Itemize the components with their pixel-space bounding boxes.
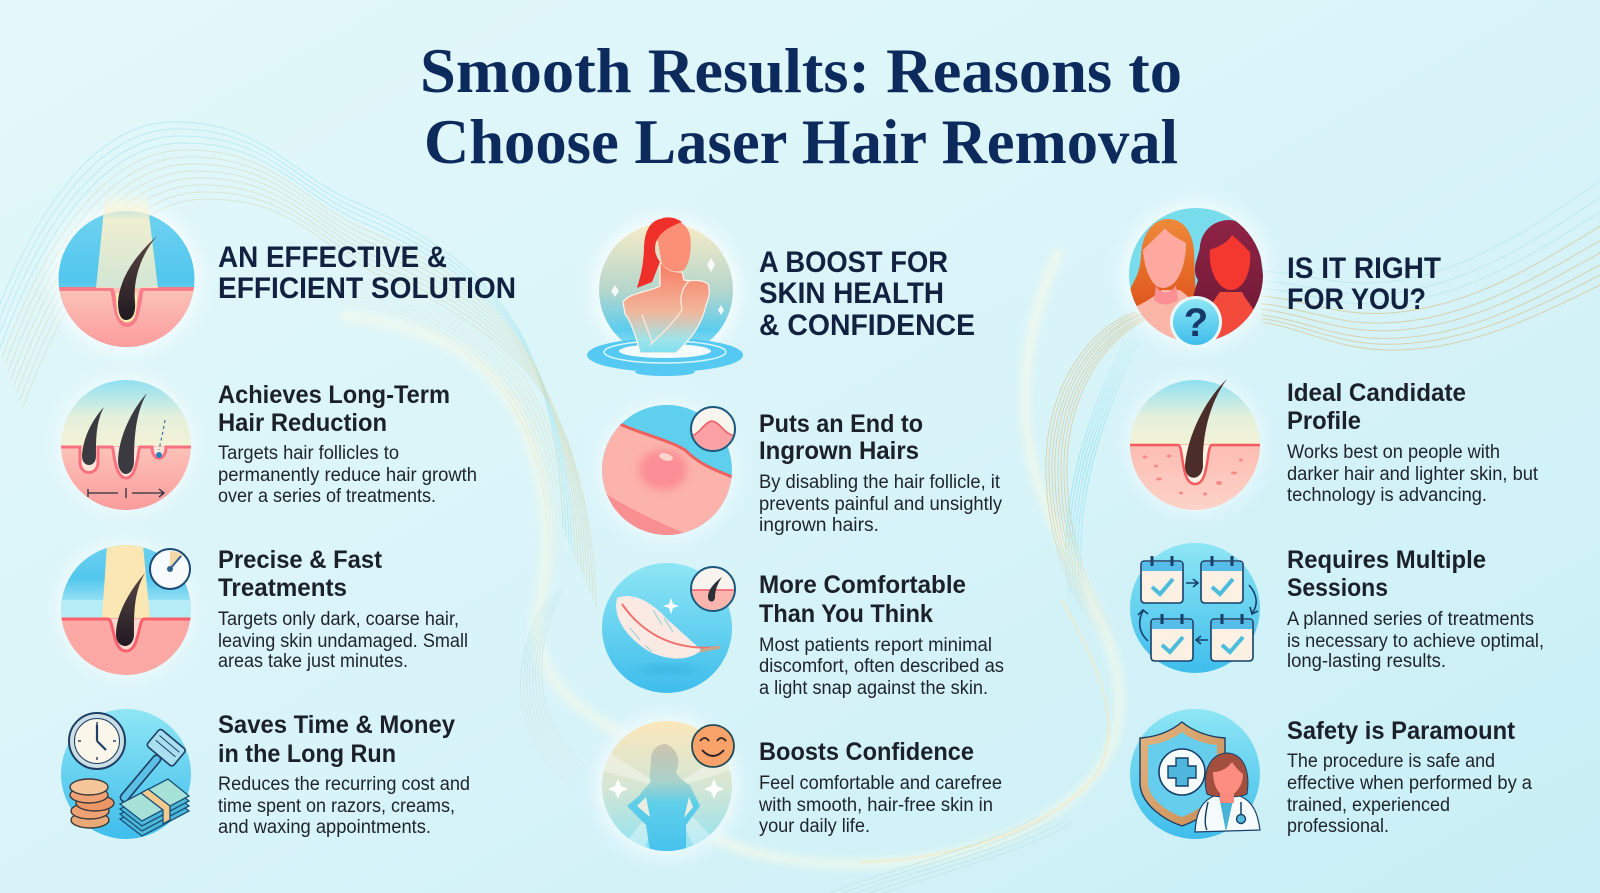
- text: boosts confidence: Feel comfortable and carefree: [759, 773, 1002, 794]
- icon: woman rising from water: [587, 216, 743, 376]
- text: saves time and money: Saves Time & Money: [218, 711, 455, 739]
- icon: ideal candidate hair on skin: [1126, 376, 1264, 514]
- text: saves time and money: [218, 711, 470, 838]
- heading: an effective and efficient solution: AN EFFECTIVE &: [218, 241, 447, 274]
- text: requires multiple sessions: Requires Multiple: [1287, 546, 1486, 574]
- text: requires multiple sessions: A planned series of treatments: [1287, 609, 1534, 630]
- text: requires multiple sessions: [1287, 546, 1544, 672]
- heading: is it right for you: FOR YOU?: [1287, 283, 1426, 316]
- text: precise and fast treatments: Precise & Fast: [218, 546, 383, 574]
- text: ideal candidate profile: [1287, 379, 1539, 506]
- text: puts an end to ingrown hairs: prevents painful and unsightly: [759, 494, 1002, 515]
- text: ideal candidate profile: Profile: [1287, 407, 1361, 435]
- text: achieves long-term hair reduction: over a series of treatments.: [218, 486, 436, 507]
- text: safety is paramount: Safety is Paramount: [1287, 717, 1516, 745]
- text: puts an end to ingrown hairs: By disabling the hair follicle, it: [759, 472, 1001, 493]
- text: achieves long-term hair reduction: Hair Reduction: [218, 409, 387, 437]
- heading: a boost for skin health and confidence: [759, 246, 975, 342]
- text: boosts confidence: with smooth, hair-free skin in: [758, 795, 993, 816]
- text: achieves long-term hair reduction: permanently reduce hair growth: [218, 465, 477, 486]
- text: safety is paramount: effective when performed by a: [1287, 773, 1532, 794]
- text: saves time and money: in the Long Run: [218, 740, 396, 768]
- heading: is it right for you: [1287, 252, 1441, 316]
- text: puts an end to ingrown hairs: Ingrown Hairs: [759, 437, 919, 465]
- heading: a boost for skin health and confidence: A BOOST FOR: [759, 246, 948, 279]
- text: more comfortable than you think: Most patients report minimal: [759, 635, 992, 656]
- icon: feather with skin badge: [602, 563, 735, 693]
- icon: confident woman with smiley: [595, 714, 739, 860]
- text: ideal candidate profile: darker hair and lighter skin, but: [1287, 464, 1539, 485]
- text: precise and fast treatments: areas take just minutes.: [218, 651, 408, 672]
- text: safety is paramount: professional.: [1287, 816, 1389, 837]
- text: ideal candidate profile: Ideal Candidate: [1287, 379, 1466, 407]
- title: [420, 35, 1182, 177]
- text: achieves long-term hair reduction: [218, 381, 477, 507]
- icon: two women with question mark: ?: [1184, 301, 1208, 345]
- text: safety is paramount: [1287, 717, 1532, 837]
- text: saves time and money: and waxing appointments.: [218, 817, 431, 838]
- text: puts an end to ingrown hairs: ingrown hairs.: [759, 515, 879, 536]
- text: precise and fast treatments: Targets only dark, coarse hair,: [218, 609, 459, 630]
- text: ideal candidate profile: technology is advancing.: [1287, 485, 1487, 506]
- heading: an effective and efficient solution: EFFICIENT SOLUTION: [218, 272, 516, 305]
- text: requires multiple sessions: Sessions: [1287, 574, 1388, 602]
- text: more comfortable than you think: discomfort, often described as: [759, 656, 1004, 677]
- text: boosts confidence: your daily life.: [759, 816, 870, 837]
- text: precise and fast treatments: Treatments: [218, 574, 347, 602]
- text: boosts confidence: [758, 738, 1002, 837]
- text: requires multiple sessions: long-lasting results.: [1287, 651, 1446, 672]
- icon: clock, razor, coins and cash: [61, 709, 191, 839]
- text: precise and fast treatments: leaving skin undamaged. Small: [218, 631, 468, 652]
- heading: a boost for skin health and confidence: SKIN HEALTH: [759, 277, 944, 310]
- text: puts an end to ingrown hairs: [759, 410, 1002, 536]
- icon: repeating session calendars: [1130, 543, 1260, 673]
- text: ideal candidate profile: Works best on people with: [1287, 442, 1500, 463]
- icon: long-term hair reduction: [57, 376, 195, 514]
- title: Choose Laser Hair Removal: [424, 106, 1178, 177]
- text: achieves long-term hair reduction: Achieves Long-Term: [218, 381, 450, 409]
- heading: an effective and efficient solution: [218, 241, 516, 305]
- heading: a boost for skin health and confidence: & CONFIDENCE: [759, 309, 975, 342]
- text: precise and fast treatments: [218, 546, 468, 672]
- icon: laser on hair follicle: [52, 190, 200, 353]
- title: Smooth Results: Reasons to: [420, 35, 1182, 106]
- icon: two women with question mark: [1122, 201, 1270, 349]
- text: boosts confidence: Boosts Confidence: [759, 738, 974, 766]
- icon: precise and fast treatments: [57, 541, 195, 679]
- text: safety is paramount: The procedure is safe and: [1287, 751, 1495, 772]
- text: saves time and money: time spent on razors, creams,: [218, 796, 455, 817]
- heading: is it right for you: IS IT RIGHT: [1287, 252, 1441, 285]
- text: more comfortable than you think: a light snap against the skin.: [759, 678, 988, 699]
- text: requires multiple sessions: is necessary to achieve optimal,: [1287, 631, 1544, 652]
- text: safety is paramount: trained, experienced: [1287, 795, 1450, 816]
- text: puts an end to ingrown hairs: Puts an End to: [759, 410, 923, 438]
- text: saves time and money: Reduces the recurring cost and: [218, 774, 470, 795]
- text: more comfortable than you think: Than You Think: [759, 600, 933, 628]
- text: achieves long-term hair reduction: Targets hair follicles to: [218, 443, 399, 464]
- icon: shield and doctor: [1130, 709, 1260, 839]
- text: more comfortable than you think: [759, 571, 1004, 699]
- text: more comfortable than you think: More Comfortable: [759, 571, 966, 599]
- icon: ingrown hair bump on skin: [598, 401, 736, 540]
